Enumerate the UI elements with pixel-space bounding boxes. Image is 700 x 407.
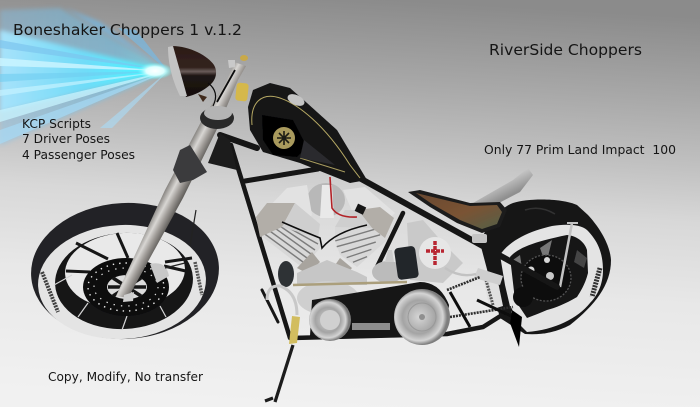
title: Boneshaker Choppers 1 v.1.2 [13,21,242,39]
red wire [330,177,357,217]
brake disc [83,210,196,316]
headlight light beam [0,8,173,146]
frame gusset [208,133,237,170]
brake line with yellow guard [267,286,300,344]
rear wheel and fender [480,199,611,334]
brand name: RiverSide Choppers [489,41,642,59]
tail light and plate [510,287,533,347]
front wheel [28,198,222,344]
feature list: 7 Driver Poses [22,132,110,146]
frame tubes [220,135,557,338]
spark plug connector [355,204,366,215]
primary cover [297,281,359,315]
ignition wires [282,222,367,248]
motorcycle [28,46,611,402]
headlight [168,46,216,106]
engine cross emblem [419,237,451,269]
right cylinder [333,187,395,276]
exhaust pipe [473,168,533,204]
front fork [116,62,246,302]
black canister [394,246,419,280]
permissions note: Copy, Modify, No transfer [48,370,203,384]
filter cap [385,250,394,262]
seat [408,190,507,243]
oil filter dome [372,261,404,283]
centre dome [307,183,345,217]
left cylinder [256,185,320,274]
rear chain and struts [447,277,513,327]
primary belt and pulleys [293,282,450,345]
prim count note: Only 77 Prim Land Impact 100 [484,143,676,157]
engine [256,177,503,315]
crankcase [297,260,367,285]
feature list [22,117,135,162]
feature list: 4 Passenger Poses [22,148,135,162]
kickstand [265,345,293,402]
oil tank [407,220,463,283]
handlebar grip and controls [217,55,249,102]
starter motor [278,261,294,287]
oil pipes [445,268,476,275]
tank emblem [273,127,295,149]
silver starter [474,268,503,285]
feature list: KCP Scripts [22,117,91,131]
fuel tank [248,83,367,183]
